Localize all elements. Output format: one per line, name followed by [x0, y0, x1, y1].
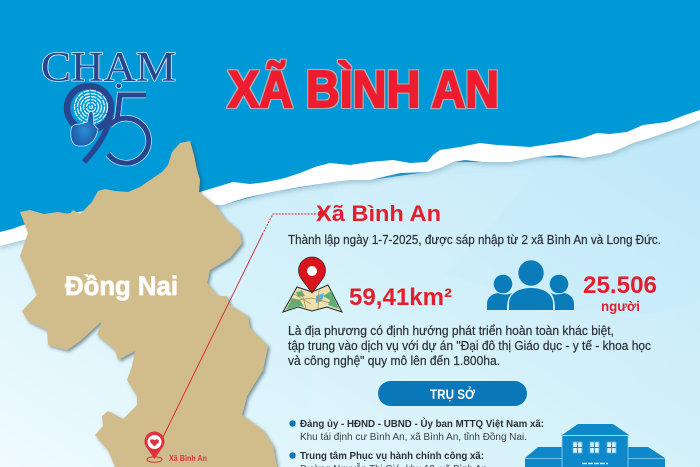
heart	[150, 439, 159, 446]
address 1: Khu tái định cư Bình An, xã Bình An, tỉnh Đồng Nai.	[300, 431, 527, 443]
population unit: người	[601, 299, 640, 314]
logo: Chạm 95	[41, 45, 176, 163]
right body	[551, 293, 574, 310]
logo fingerprint	[74, 90, 108, 124]
wing roof line	[525, 458, 665, 460]
window bars	[573, 442, 616, 453]
icon: people	[487, 260, 574, 310]
right person	[550, 275, 568, 293]
map water	[316, 293, 324, 303]
pin base ring	[147, 457, 162, 462]
pin	[298, 257, 326, 293]
folded map	[283, 285, 342, 312]
background: light content area	[0, 120, 700, 467]
left person	[494, 275, 512, 293]
logo hand	[71, 112, 98, 146]
pin heart	[148, 435, 162, 449]
centre person	[518, 260, 544, 286]
section pill: Trụ sở	[378, 381, 527, 406]
address 2: Trung tâm Phục vụ hành chính công xã:	[300, 450, 484, 462]
description paragraph: tập trung vào dịch vụ với dự án "Đại đô thị Giáo dục - y tế - khoa học	[288, 339, 651, 353]
sign	[582, 462, 608, 464]
title: XÃ BÌNH AN	[228, 60, 499, 119]
windows	[573, 442, 616, 453]
main roof	[562, 424, 629, 435]
description paragraph: Là địa phương có định hướng phát triển hoàn toàn khác biệt,	[288, 324, 614, 338]
address list	[289, 417, 544, 467]
main block	[562, 436, 628, 467]
address 2	[289, 450, 487, 467]
logo numeral 9	[67, 86, 111, 162]
background: soft light wave shapes	[300, 170, 700, 467]
map green areas	[286, 291, 339, 310]
logo numeral 5	[108, 95, 149, 163]
description paragraph: và công nghệ" quy mô lên đến 1.800ha.	[288, 354, 500, 368]
icon: folded map with pin	[283, 257, 342, 312]
map roads	[291, 288, 330, 309]
roof edge	[561, 436, 629, 467]
torn white paper edge	[0, 110, 700, 246]
description paragraph	[288, 324, 651, 368]
map label: Đồng Nai: Đồng Nai	[65, 271, 178, 301]
side wings	[525, 447, 665, 467]
address 1	[289, 417, 544, 443]
centre body	[509, 288, 553, 310]
pin body	[144, 432, 164, 459]
pill label: TRỤ SỞ	[430, 385, 475, 402]
pill background	[378, 381, 527, 406]
logo word: CHẠM: CHẠM	[41, 45, 176, 91]
pin label: Xã Bình An	[169, 454, 207, 463]
pin hole	[307, 266, 317, 276]
map shape	[20, 141, 277, 467]
icon: headquarters building	[525, 424, 665, 467]
left body	[487, 293, 512, 310]
map pin: Xã Bình An	[144, 432, 207, 463]
callout line from map pin to heading	[163, 211, 324, 437]
stat: area: 59,41km²	[349, 284, 452, 311]
address 1: Đảng ủy - HĐND - UBND - Ủy ban MTTQ Việt Nam xã:	[300, 417, 544, 430]
map of Đồng Nai province	[20, 141, 277, 467]
intro text: Thành lập ngày 1-7-2025, được sáp nhập từ 2 xã Bình An và Long Đức.	[288, 233, 661, 247]
heading: Xã Bình An: Xã Bình An	[316, 201, 441, 226]
stat: population	[583, 272, 657, 314]
population number: 25.506	[583, 272, 657, 299]
